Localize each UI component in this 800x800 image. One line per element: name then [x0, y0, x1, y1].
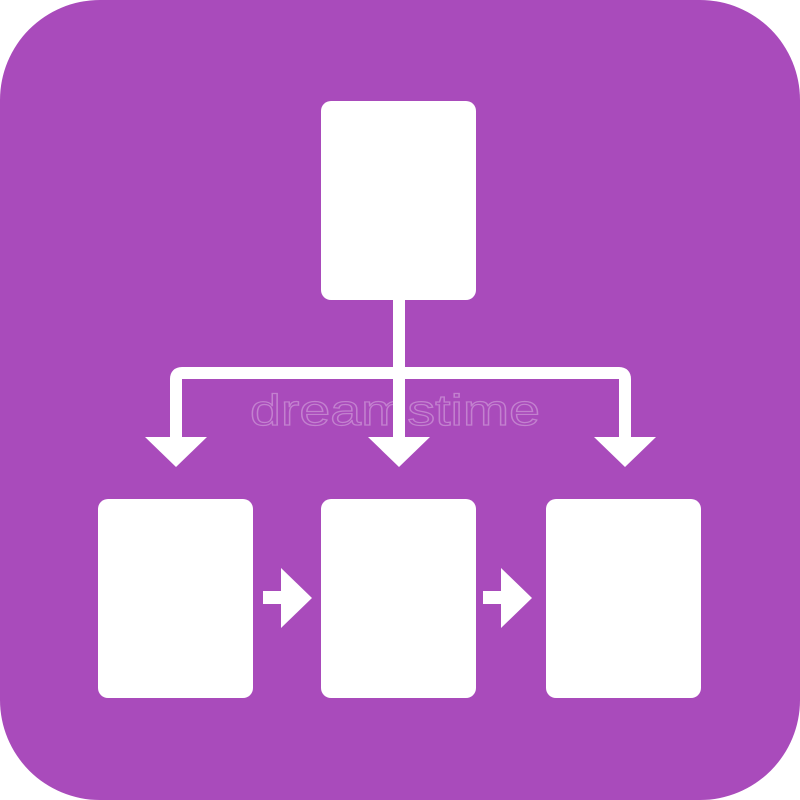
box: bottom middle	[321, 499, 476, 698]
connector: stem and branches	[176, 300, 625, 442]
watermark text: dreamstime	[250, 386, 540, 435]
arrow: middle to right	[483, 568, 532, 628]
box: top	[321, 101, 476, 300]
arrowhead: middle	[368, 437, 430, 467]
arrowhead: left	[145, 437, 207, 467]
box: bottom right	[546, 499, 701, 698]
arrowhead: right	[594, 437, 656, 467]
box: bottom left	[98, 499, 253, 698]
arrow: left to middle	[263, 568, 312, 628]
